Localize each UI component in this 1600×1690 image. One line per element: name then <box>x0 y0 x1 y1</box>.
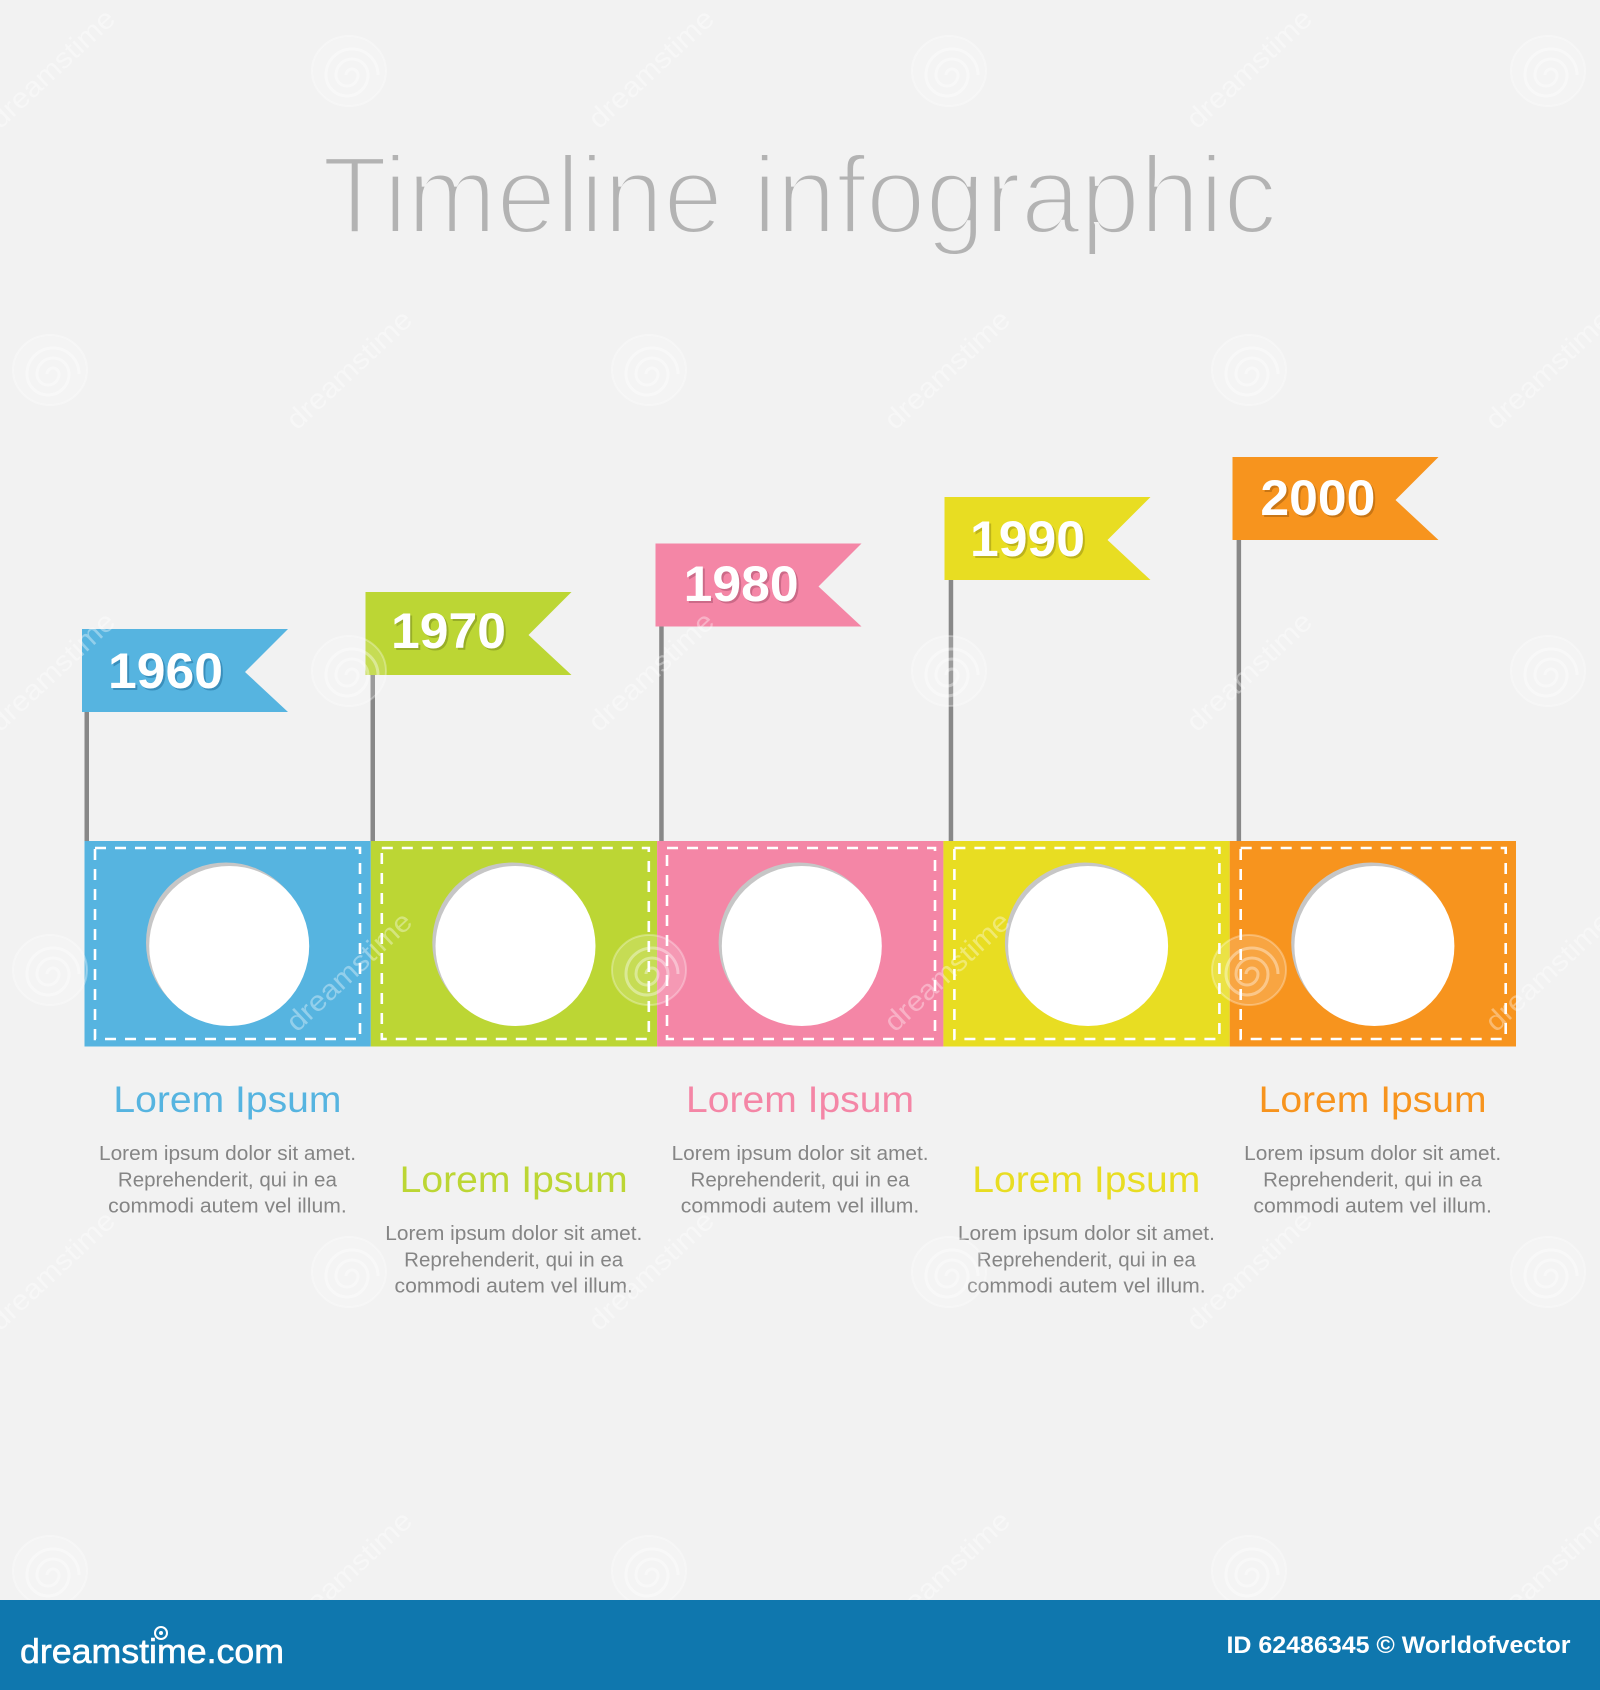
flag: 2000: 2000 <box>1260 470 1375 526</box>
text block: 1990: Lorem Ipsum <box>972 1159 1200 1200</box>
flag: 2000: 2000 <box>1262 472 1377 528</box>
flag: 1970: 1970 <box>393 605 508 661</box>
text block: 1960: Reprehenderit, qui in ea <box>118 1169 338 1191</box>
watermark text: dreamstime <box>1180 606 1318 737</box>
watermark text: dreamstime <box>582 1205 720 1336</box>
footer logo: dreamstime.com <box>20 1633 284 1671</box>
flag: 1970: 1970 <box>391 603 506 659</box>
text block: 1980: commodi autem vel illum. <box>681 1196 919 1218</box>
text block: 1990 <box>958 1159 1215 1298</box>
text block: 1960: Lorem Ipsum <box>113 1079 341 1120</box>
panel: 2000 block <box>1230 841 1516 1046</box>
watermark text: dreamstime <box>280 304 418 435</box>
footer bar <box>0 1600 1600 1690</box>
text block: 1970: Lorem Ipsum <box>400 1159 628 1200</box>
text block: 1980: Lorem ipsum dolor sit amet. <box>672 1143 929 1165</box>
text block: 1970: commodi autem vel illum. <box>394 1276 633 1298</box>
text block: 2000: commodi autem vel illum. <box>1253 1196 1492 1218</box>
timeline poles <box>84 530 1241 841</box>
text block: 1960 <box>99 1079 356 1218</box>
flag: 1990 <box>944 497 1150 580</box>
panel: 1970 block <box>371 841 657 1046</box>
title: Timeline infographic <box>322 134 1277 257</box>
text block: 1980: Lorem Ipsum <box>686 1079 914 1120</box>
flag: 1990: 1990 <box>970 511 1085 567</box>
flag: 1960: 1960 <box>108 643 223 699</box>
text block: 1990: commodi autem vel illum. <box>967 1276 1206 1298</box>
text block: 1960: Lorem ipsum dolor sit amet. <box>99 1143 356 1165</box>
watermark text: dreamstime <box>878 1505 1016 1636</box>
flag: 1960 <box>82 629 288 712</box>
watermark text: dreamstime <box>582 606 720 737</box>
flag: 1960: 1960 <box>110 645 225 701</box>
watermark text: dreamstime <box>1180 3 1318 134</box>
flag: 1990: 1990 <box>972 513 1087 569</box>
watermark text: dreamstime <box>1180 1205 1318 1336</box>
text block: 2000 <box>1244 1079 1501 1218</box>
watermark text: dreamstime <box>878 906 1016 1037</box>
text block: 2000: Reprehenderit, qui in ea <box>1263 1169 1483 1191</box>
panel: 1960 block <box>84 841 371 1046</box>
watermark text: dreamstime <box>280 1505 418 1636</box>
text block: 2000: Lorem ipsum dolor sit amet. <box>1244 1143 1501 1165</box>
text block: 1990: Reprehenderit, qui in ea <box>977 1249 1197 1271</box>
flag: 2000 <box>1232 457 1438 540</box>
panel: 1980 block <box>657 841 943 1046</box>
text block: 1980: Reprehenderit, qui in ea <box>690 1169 910 1191</box>
footer credit: ID 62486345 © Worldofvector <box>1226 1632 1570 1659</box>
flag: 1980: 1980 <box>684 556 799 612</box>
text block: 1990: Lorem ipsum dolor sit amet. <box>958 1223 1215 1245</box>
flag: 1980 <box>656 544 862 626</box>
watermark text: dreamstime <box>280 906 418 1037</box>
flag: 1970 <box>366 592 572 675</box>
text block: 1960: commodi autem vel illum. <box>108 1196 347 1218</box>
text block: 1970: Lorem ipsum dolor sit amet. <box>385 1223 642 1245</box>
watermark text: dreamstime <box>582 3 720 134</box>
watermark text: dreamstime <box>878 304 1016 435</box>
flag: 1980: 1980 <box>686 558 801 614</box>
text block: 1980 <box>672 1079 929 1218</box>
text block: 1970 <box>385 1159 642 1298</box>
panel: 1990 block <box>943 841 1230 1046</box>
text block: 1970: Reprehenderit, qui in ea <box>404 1249 624 1271</box>
text block: 2000: Lorem Ipsum <box>1259 1079 1487 1120</box>
